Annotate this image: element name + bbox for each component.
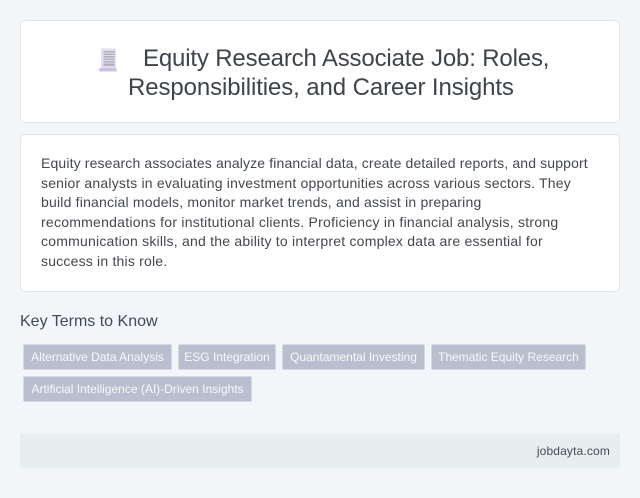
title: Responsibilities, and Career Insights (128, 74, 514, 101)
tag: ESG integration (178, 344, 276, 370)
description text (41, 155, 588, 268)
footer bar (20, 434, 620, 468)
tag: thematic equity research (431, 344, 586, 370)
title: Equity Research Associate Job: Roles, (143, 45, 549, 72)
footer source text: jobdayta.com (537, 444, 610, 458)
description text: Equity research associates analyze financial data, create detailed reports, and support (41, 155, 588, 171)
key term tags (23, 344, 586, 402)
tag: ESG integration: ESG Integration (184, 350, 270, 364)
tag: thematic equity research: Thematic Equity Research (438, 350, 579, 364)
tag: quantamental investing: Quantamental Investing (290, 350, 417, 364)
description text: recommendations for institutional clients. Proficiency in financial analysis, strong (41, 214, 558, 230)
tag: alternative data analysis (23, 344, 172, 370)
description text: success in this role. (41, 252, 167, 268)
description text: senior analysts in evaluating investment opportunities across various sectors. They (41, 174, 571, 190)
heading: key terms: Key Terms to Know (20, 313, 158, 330)
panel: description card (20, 134, 620, 292)
title (128, 45, 549, 101)
description text: communication skills, and the ability to interpret complex data are essential for (41, 233, 543, 249)
icon: document scroll (98, 48, 117, 72)
tag: quantamental investing (282, 344, 425, 370)
tag: AI-driven insights (23, 376, 252, 402)
tag: alternative data analysis: Alternative Data Analysis (31, 350, 164, 364)
tag: AI-driven insights: Artificial Intelligence (AI)-Driven Insights (31, 382, 244, 396)
panel: title card (20, 20, 620, 123)
description text: build financial models, monitor market trends, and assist in preparing (41, 194, 481, 210)
